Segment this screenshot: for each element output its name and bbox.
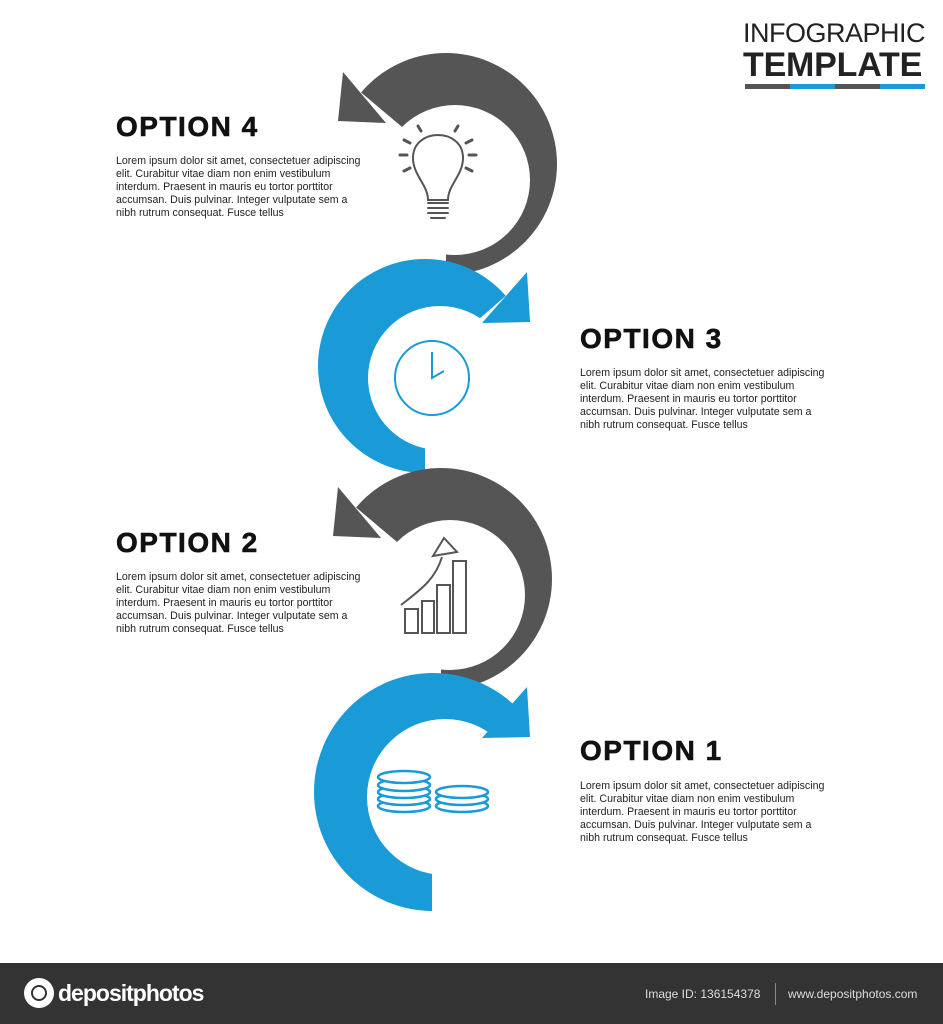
icon: light bulb — [400, 126, 476, 218]
option 4 text: Lorem ipsum dolor sit amet, consectetuer adipiscing elit. Curabitur vitae diam non enim vestibulum interdum. Praesent in mauris eu tortor porttitor accumsan. Duis pulvinar. Integer vulputate sem a nibh rutrum consequat. Fusce tellus — [116, 155, 360, 219]
icon: growth chart — [401, 538, 466, 633]
title: INFOGRAPHIC — [743, 18, 925, 48]
icon: clock — [395, 341, 469, 415]
arc: option 3 blue — [318, 259, 532, 473]
option 3 text: Lorem ipsum dolor sit amet, consectetuer adipiscing elit. Curabitur vitae diam non enim vestibulum interdum. Praesent in mauris eu tortor porttitor accumsan. Duis pulvinar. Integer vulputate sem a nibh rutrum consequat. Fusce tellus — [580, 367, 824, 431]
option 2 text: Lorem ipsum dolor sit amet, consectetuer adipiscing elit. Curabitur vitae diam non enim vestibulum interdum. Praesent in mauris eu tortor porttitor accumsan. Duis pulvinar. Integer vulputate sem a nibh rutrum consequat. Fusce tellus — [116, 571, 360, 635]
option 4 heading: OPTION 4 — [116, 111, 259, 142]
image id: Image ID: 136154378 — [645, 987, 760, 1001]
footer bar — [0, 963, 943, 1024]
option 3 heading: OPTION 3 — [580, 323, 723, 354]
logo text: depositphotos — [58, 980, 203, 1006]
option 1 text: Lorem ipsum dolor sit amet, consectetuer adipiscing elit. Curabitur vitae diam non enim vestibulum interdum. Praesent in mauris eu tortor porttitor accumsan. Duis pulvinar. Integer vulputate sem a nibh rutrum consequat. Fusce tellus — [580, 780, 824, 844]
option 2 heading: OPTION 2 — [116, 527, 259, 558]
arc: option 1 blue — [314, 673, 552, 911]
arc: option 2 gray — [330, 468, 552, 690]
title: TEMPLATE — [743, 46, 922, 84]
url: www.depositphotos.com — [788, 987, 917, 1001]
icon: camera logo — [24, 978, 54, 1008]
option 1 heading: OPTION 1 — [580, 735, 723, 766]
icon: coins — [378, 771, 488, 812]
title — [743, 18, 925, 89]
arc: option 4 gray — [335, 53, 557, 275]
diagram — [314, 53, 557, 911]
